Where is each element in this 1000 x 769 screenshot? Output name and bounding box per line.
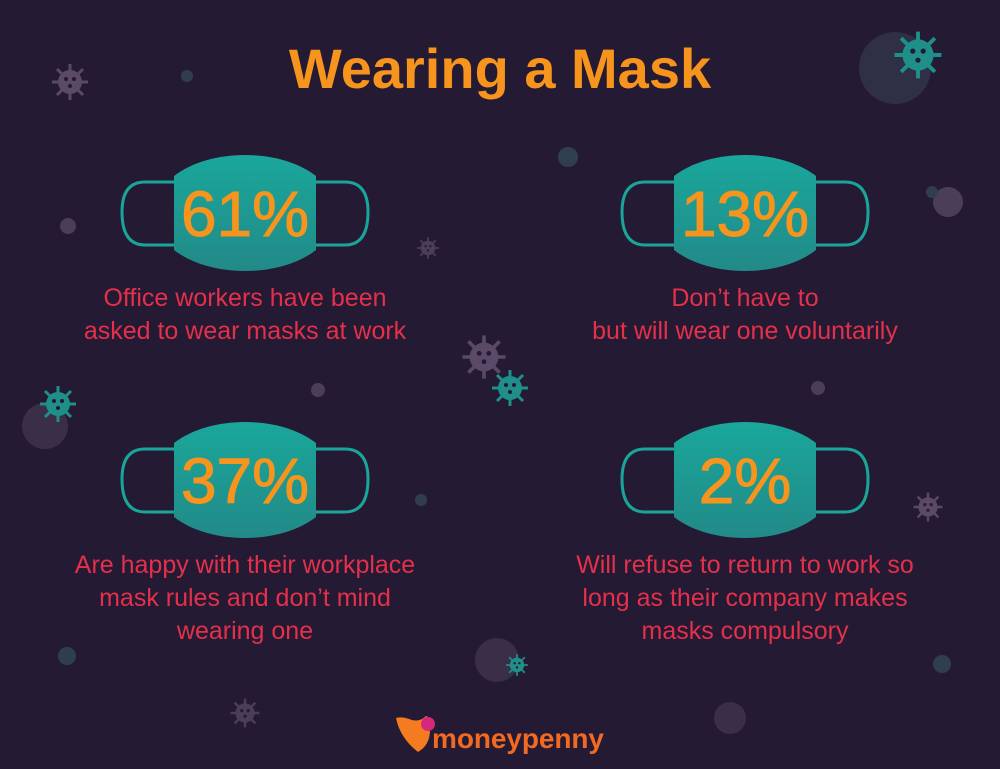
title: Wearing a Mask <box>289 37 712 100</box>
panel: 37%: wearing one <box>176 617 313 645</box>
panel: 2%: masks compulsory <box>642 617 849 645</box>
panel: 2%: 2% <box>699 445 791 517</box>
panel: 61%: 61% <box>181 178 309 250</box>
panel: 2% <box>576 422 914 645</box>
panel: 13%: but will wear one voluntarily <box>592 317 898 345</box>
logo: moneypenny: moneypenny <box>432 723 604 754</box>
panel: 2%: Will refuse to return to work so <box>576 551 914 579</box>
panel: 37%: Are happy with their workplace <box>75 551 415 579</box>
panel: 13%: 13% <box>681 178 809 250</box>
panel: 37%: 37% <box>181 445 309 517</box>
panel: 61%: Office workers have been <box>103 284 387 312</box>
panel: 2%: long as their company makes <box>582 584 908 612</box>
panel: 61%: asked to wear masks at work <box>84 317 407 345</box>
logo: moneypenny <box>396 716 604 754</box>
panel: 37% <box>75 422 415 645</box>
panel: 61% <box>84 155 407 345</box>
panel: 37%: mask rules and don’t mind <box>99 584 391 612</box>
panel: 13%: Don’t have to <box>671 284 819 312</box>
panel: 13% <box>592 155 898 345</box>
